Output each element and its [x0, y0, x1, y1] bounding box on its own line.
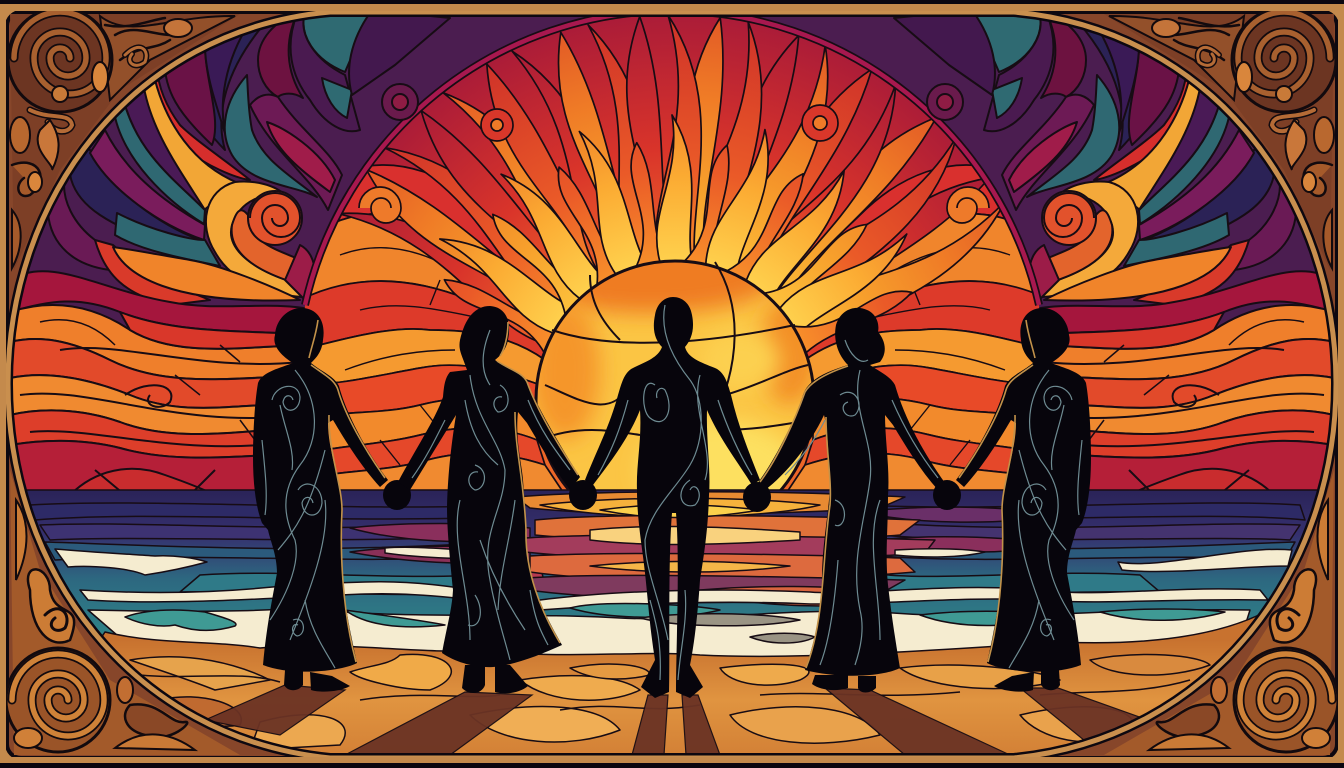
side wave bands — [300, 165, 585, 495]
outer sky ribbons: left — [10, 10, 450, 495]
corner ornament: top left — [8, 8, 240, 270]
swirl lines 1 — [262, 370, 335, 668]
swirl lines 2 — [412, 330, 570, 660]
sun colour blotches — [538, 262, 812, 490]
sun — [534, 260, 814, 490]
outer sky ribbons: right — [894, 10, 1334, 495]
corner ornament: bottom right — [1104, 470, 1338, 755]
hand — [743, 482, 771, 512]
small swirls outside arch — [382, 84, 963, 120]
silhouette 2 — [398, 306, 580, 693]
gold edge 1 — [309, 320, 385, 662]
person 2 — [398, 306, 597, 693]
gold edge 4 — [760, 366, 848, 668]
person 1 — [253, 308, 411, 692]
silhouette 3 — [585, 297, 760, 698]
person 5 — [933, 308, 1091, 692]
person 3: central man — [585, 297, 760, 698]
hand — [569, 480, 597, 510]
swirl lines 4 — [785, 340, 938, 665]
swirl lines 3 — [598, 305, 752, 680]
beach — [102, 614, 1258, 753]
corner ornament: top right — [1104, 8, 1336, 270]
sun lead lines — [534, 260, 814, 490]
person 4 — [743, 308, 945, 692]
arch outline — [305, 11, 1039, 305]
silhouette 4 — [757, 308, 945, 692]
sea — [0, 490, 1344, 660]
side wave bands mirrored — [788, 164, 1040, 490]
gold edge 2 — [497, 322, 578, 643]
spiral lines on left swirl — [250, 193, 300, 237]
silhouette 1 — [253, 308, 388, 692]
sun reflection — [515, 492, 935, 606]
arch interior: radiating flames — [290, 0, 1060, 500]
figure shadows — [205, 685, 1148, 755]
spiral lines on right swirl — [1044, 193, 1094, 237]
corner ornament: bottom left — [6, 470, 240, 755]
hand — [383, 480, 411, 510]
sky base — [29, 17, 1315, 327]
